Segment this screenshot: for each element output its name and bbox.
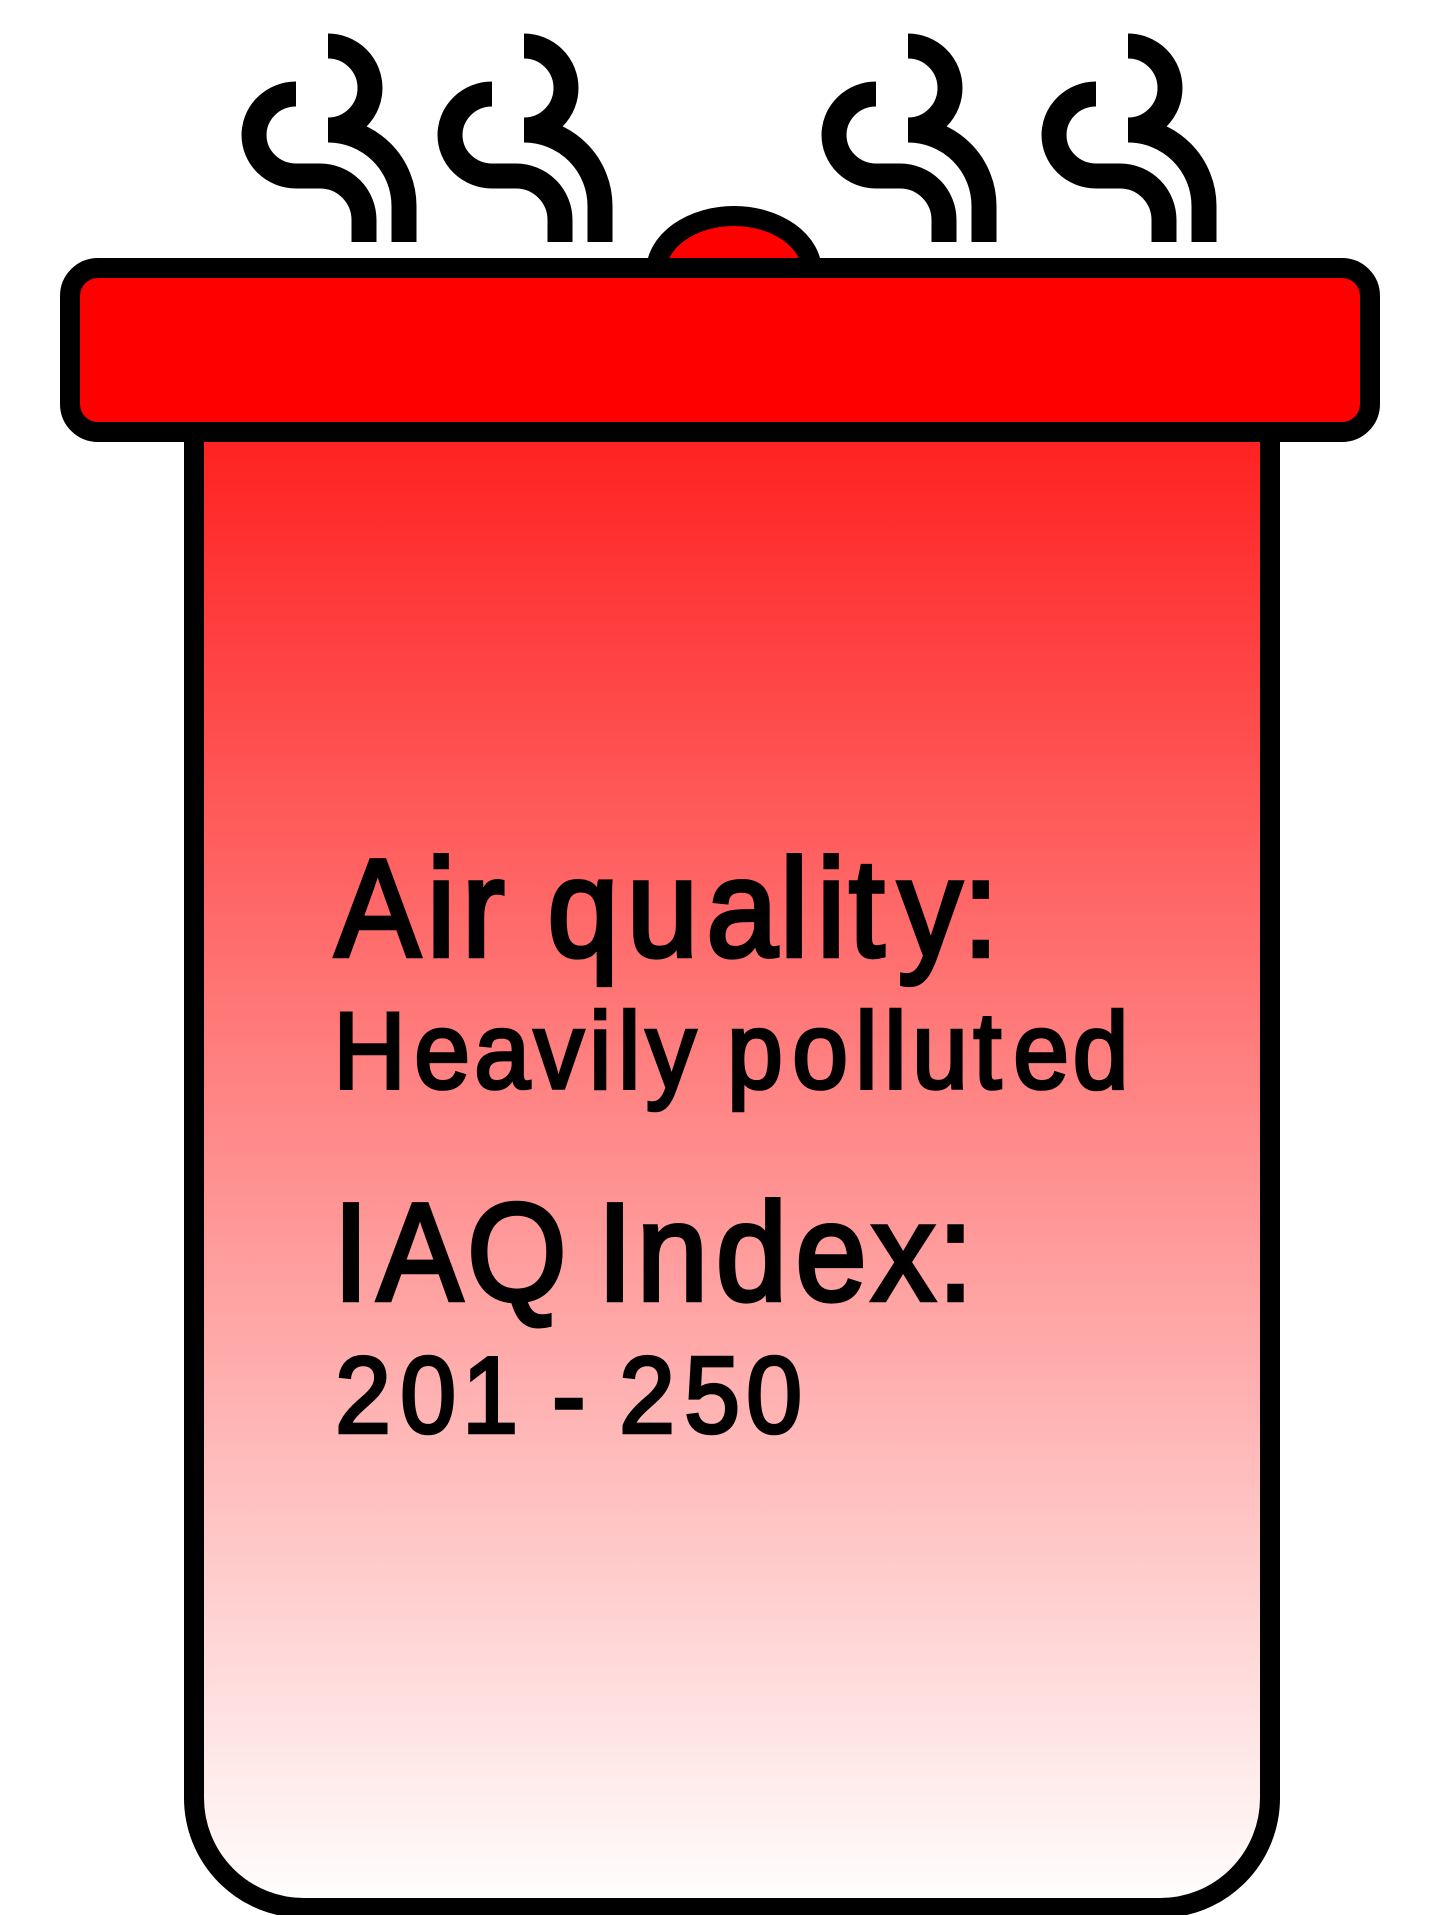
lid knob	[656, 216, 812, 328]
icon: steam group 4	[1054, 46, 1204, 242]
heading: air quality: Air quality:	[335, 831, 998, 986]
text block: IAQ index	[333, 1175, 973, 1456]
icon: steam group 1	[254, 46, 404, 242]
panel: container body with gradient	[194, 340, 1270, 1908]
heading: IAQ index: IAQ Index:	[333, 1175, 973, 1330]
text block: air quality	[333, 831, 1128, 1112]
icon: steam group 2	[450, 46, 600, 242]
value: index range: 201 - 250	[335, 1335, 802, 1456]
value: heavily polluted: Heavily polluted	[333, 990, 1128, 1112]
lid	[70, 268, 1370, 432]
icon: steam group 3	[834, 46, 984, 242]
